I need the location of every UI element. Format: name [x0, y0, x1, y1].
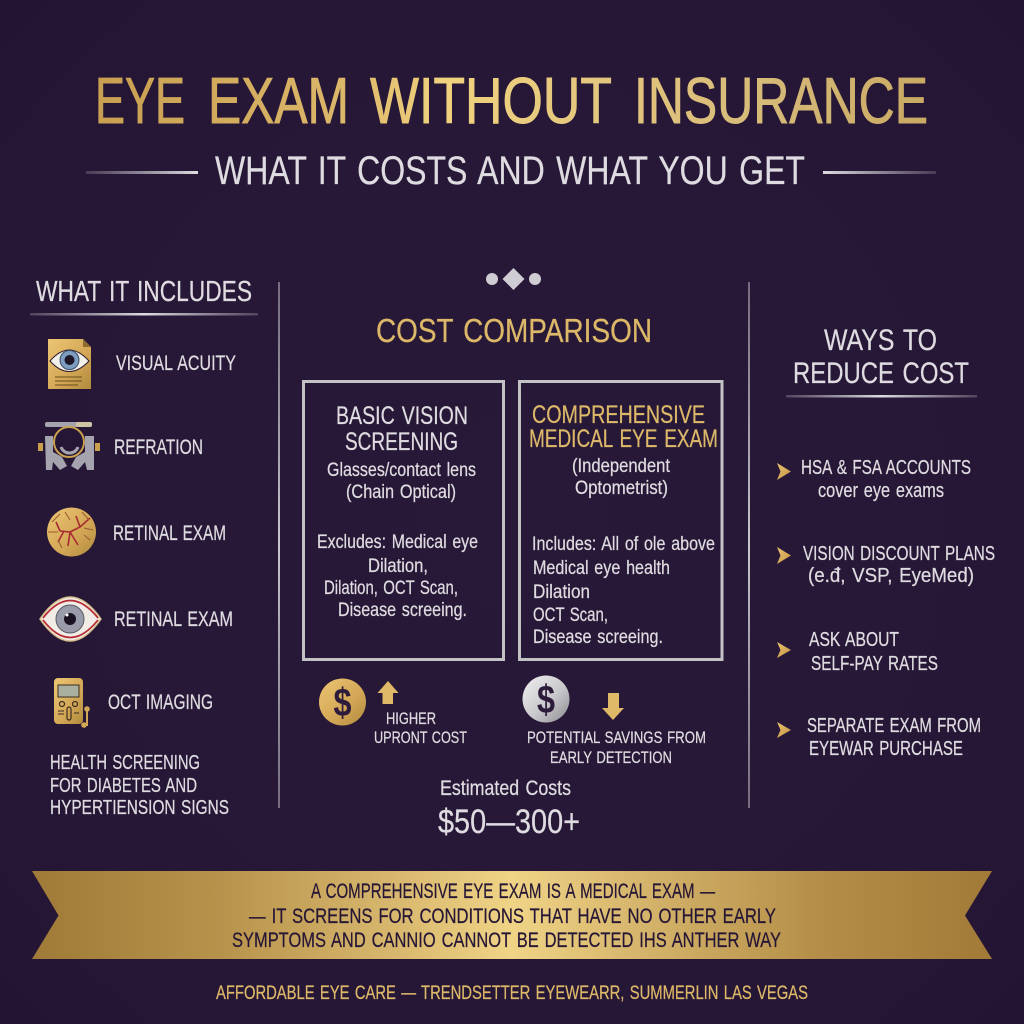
banner: key message: [32, 871, 992, 959]
tip: self-pay rates: [777, 629, 938, 675]
callout: potential savings: [522, 676, 706, 767]
panel: what it includes: [30, 276, 258, 819]
label: OCT imaging: OCT IMAGING: [108, 691, 213, 714]
text: health screening: HYPERTIENSION SIGNS: [50, 796, 229, 819]
panel: comprehensive medical eye exam: [520, 382, 722, 660]
banner: key message: — IT SCREENS FOR CONDITIONS THAT HAVE NO OTHER EARLY: [249, 905, 776, 928]
tip: separate exam from eyewear: EYEWAR PURCHASE: [809, 738, 963, 760]
tip: self-pay rates: SELF-PAY RATES: [811, 653, 938, 675]
callout: potential savings: EARLY DETECTION: [550, 748, 672, 767]
tip: separate exam from eyewear: [777, 715, 981, 760]
title: EYE: [95, 64, 185, 137]
icon: down arrow: [602, 693, 624, 720]
icon: OCT device: [54, 678, 90, 728]
tip: vision discount plans: (e.đ, VSP, EyeMed): [808, 565, 974, 587]
panel: basic vision screening: BASIC VISION: [336, 402, 468, 430]
panel: comprehensive medical eye exam: Optometrist): [575, 478, 668, 499]
banner: key message: A COMPREHENSIVE EYE EXAM IS A MEDICAL EXAM —: [311, 880, 715, 903]
icon: gold dollar coin: $: [334, 681, 352, 725]
icon: up arrow: [378, 681, 398, 704]
panel: basic vision screening: SCREENING: [345, 428, 458, 456]
tip: self-pay rates: ASK ABOUT: [809, 629, 899, 651]
panel: comprehensive medical eye exam: COMPREHENSIVE: [532, 401, 705, 429]
text: health screening: [50, 751, 229, 819]
estimated costs: Estimated Costs: [440, 776, 571, 800]
icon: eye document: [48, 339, 91, 389]
icon: gold dollar coin: [319, 678, 366, 726]
subtitle with flanking lines: WHAT IT COSTS AND WHAT YOU GET: [215, 149, 805, 193]
panel: comprehensive medical eye exam: Includes: All of ole above: [532, 534, 715, 555]
panel: comprehensive medical eye exam: Disease screeing.: [533, 627, 663, 648]
panel: basic vision screening: Dilation, OCT Scan,: [324, 578, 458, 599]
label: refraction: REFRATION: [114, 436, 203, 459]
callout: higher upfront cost: HIGHER: [386, 709, 436, 728]
icon: silver dollar coin: $: [537, 678, 555, 722]
panel: basic vision screening: Glasses/contact lens: [327, 460, 476, 481]
estimated costs: $50—300+: [438, 803, 580, 841]
panel: basic vision screening: Excludes: Medical eye: [317, 532, 478, 553]
panel: comprehensive medical eye exam: OCT Scan,: [533, 605, 608, 626]
icon: retina: [47, 508, 96, 556]
title: EXAM: [208, 64, 349, 137]
banner: key message: SYMPTOMS AND CANNIO CANNOT BE DETECTED IHS ANTHER WAY: [232, 929, 781, 952]
ornament: dots and diamond: [486, 268, 541, 290]
callout: potential savings: POTENTIAL SAVINGS FROM: [527, 728, 706, 747]
heading: ways to reduce cost: [793, 324, 969, 390]
icon: phoropter: [38, 422, 100, 470]
title: INSURANCE: [634, 64, 928, 137]
callout: higher upfront cost: UPRONT COST: [374, 728, 467, 747]
text: health screening: HEALTH SCREENING: [50, 751, 200, 774]
panel: ways to reduce cost: [777, 324, 995, 760]
tip: vision discount plans: [777, 543, 995, 587]
heading: what it includes: WHAT IT INCLUDES: [36, 276, 252, 308]
icon: silver dollar coin: [522, 676, 570, 722]
text: health screening: FOR DIABETES AND: [50, 774, 197, 797]
panel: basic vision screening: [304, 382, 504, 660]
title: [95, 64, 928, 137]
panel: comprehensive medical eye exam: MEDICAL EYE EXAM: [529, 425, 718, 453]
panel: comprehensive medical eye exam: (Independent: [572, 456, 671, 477]
tip: HSA and FSA: [777, 457, 971, 502]
panel: basic vision screening: Dilation,: [368, 556, 428, 577]
panel: basic vision screening: Disease screeing.: [338, 600, 467, 621]
label: retinal exam: RETINAL EXAM: [113, 522, 226, 545]
icon: eye: [40, 597, 101, 641]
panel: comprehensive medical eye exam: Medical eye health: [533, 558, 670, 579]
footer: AFFORDABLE EYE CARE — TRENDSETTER EYEWEARR, SUMMERLIN LAS VEGAS: [216, 982, 808, 1004]
tip: HSA and FSA: cover eye exams: [818, 480, 944, 502]
label: visual acuity: VISUAL ACUITY: [116, 352, 236, 375]
callout: higher upfront cost: [319, 678, 467, 747]
heading: cost comparison: COST COMPARISON: [376, 312, 652, 349]
heading: ways to reduce cost: REDUCE COST: [793, 357, 969, 390]
estimated costs: [438, 776, 580, 841]
heading: ways to reduce cost: WAYS TO: [824, 324, 937, 357]
tip: HSA and FSA: HSA & FSA ACCOUNTS: [801, 457, 971, 479]
panel: comprehensive medical eye exam: Dilation: [533, 582, 590, 603]
label: retinal exam 2: RETINAL EXAM: [114, 608, 233, 631]
title: WITHOUT: [370, 64, 612, 137]
panel: basic vision screening: (Chain Optical): [346, 482, 456, 503]
